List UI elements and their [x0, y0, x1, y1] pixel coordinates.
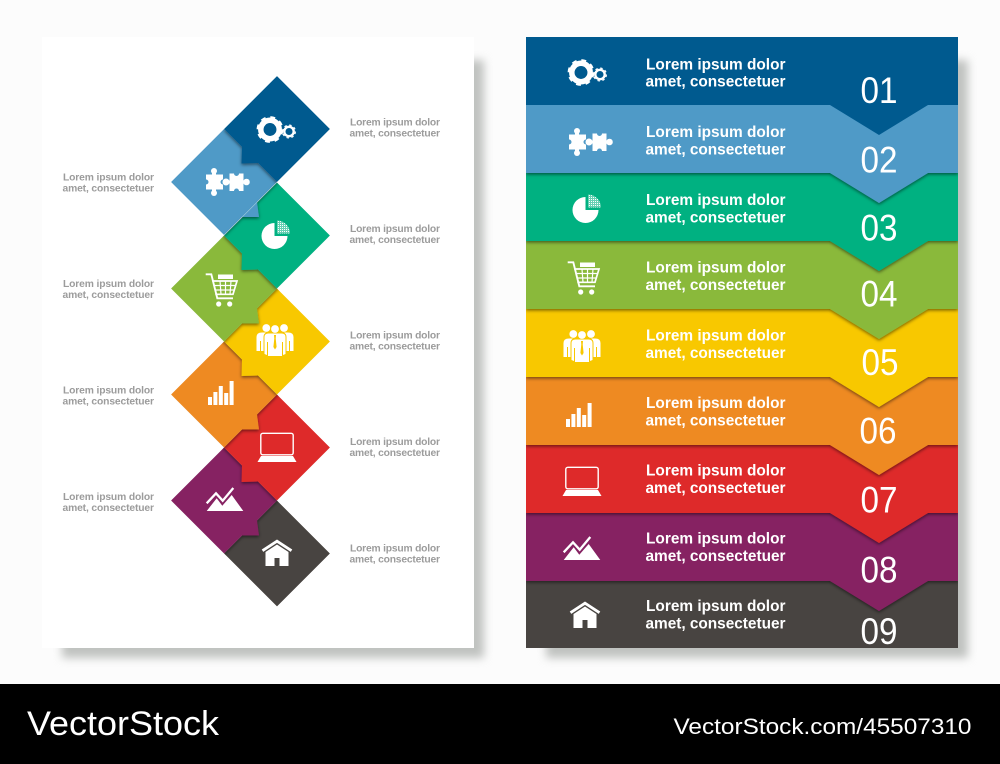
left caption 6: amet, consectetuer: [62, 396, 154, 408]
left caption 7: [350, 437, 440, 459]
ribbon 04: Lorem ipsum dolor: [646, 260, 786, 276]
left caption 5: [350, 330, 440, 352]
ribbon 09: Lorem ipsum dolor: [646, 598, 786, 615]
ribbon 08: amet, consectetuer: [646, 548, 786, 565]
ribbon 01: Lorem ipsum dolor: [646, 56, 786, 73]
ribbon 02: 02: [860, 140, 898, 180]
ribbon 03: amet, consectetuer: [646, 210, 786, 226]
diamond 6: orange bars: [171, 342, 277, 448]
left caption 4: Lorem ipsum dolor: [63, 279, 154, 290]
ribbon 06: Lorem ipsum dolor: [646, 395, 786, 412]
ribbon 07: 07: [860, 480, 898, 520]
ribbon 02: amet, consectetuer: [646, 142, 786, 158]
diamond 2: light blue puzzle: [171, 129, 277, 235]
ribbon 01: amet, consectetuer: [646, 74, 786, 91]
panel: numbered ribbons: [526, 37, 958, 652]
ribbon 05: [526, 309, 958, 407]
left caption 7: amet, consectetuer: [350, 448, 440, 459]
left caption 9: [350, 544, 440, 566]
footer bar: [0, 684, 1000, 764]
diamond 1: navy gears: [224, 76, 330, 182]
left caption 2: [62, 172, 154, 194]
ribbon 03: [526, 173, 958, 271]
left caption 3: amet, consectetuer: [350, 235, 440, 246]
left caption 3: [350, 224, 440, 246]
ribbon 05: amet, consectetuer: [646, 345, 786, 362]
left caption 2: amet, consectetuer: [62, 184, 154, 194]
diamond 9: dark grey home: [224, 500, 330, 606]
ribbon 07: [526, 445, 958, 543]
left caption 6: Lorem ipsum dolor: [63, 386, 154, 396]
footer image id: VectorStock.com/45507310: [674, 714, 972, 739]
left caption 1: amet, consectetuer: [350, 128, 440, 140]
left caption 8: Lorem ipsum dolor: [63, 492, 154, 503]
left panel background: [42, 37, 474, 648]
ribbon 02: Lorem ipsum dolor: [646, 124, 786, 141]
ribbon 05: 05: [862, 342, 898, 383]
ribbon 06: [526, 377, 958, 475]
ribbon 08: 08: [860, 550, 898, 590]
diamond 5: yellow people: [224, 288, 330, 394]
left caption 7: Lorem ipsum dolor: [350, 437, 440, 448]
left caption 4: amet, consectetuer: [62, 290, 154, 301]
right panel shadow: [546, 60, 968, 658]
left caption 1: Lorem ipsum dolor: [350, 118, 440, 128]
ribbon 09: [526, 581, 958, 652]
diamond 8: purple chart: [171, 448, 277, 554]
left caption 5: amet, consectetuer: [350, 342, 440, 352]
left caption 6: [62, 386, 154, 408]
ribbon 02: [526, 105, 958, 203]
ribbon 07: Lorem ipsum dolor: [646, 462, 786, 480]
ribbon 04: 04: [860, 274, 898, 314]
ribbon 09: 09: [860, 611, 898, 652]
left caption 9: Lorem ipsum dolor: [350, 544, 440, 554]
left caption 8: amet, consectetuer: [62, 503, 154, 514]
ribbon 04: amet, consectetuer: [646, 277, 786, 294]
diamond 4: olive cart: [171, 236, 277, 342]
diamond 3: green pie: [224, 182, 330, 288]
footer logo text: VectorStock: [27, 705, 220, 743]
left caption 4: [62, 279, 154, 301]
ribbon 08: Lorem ipsum dolor: [646, 530, 786, 548]
ribbon 04: [526, 241, 958, 339]
left caption 5: Lorem ipsum dolor: [350, 330, 440, 342]
left caption 1: [350, 118, 440, 140]
diamond 7: red laptop: [224, 394, 330, 500]
ribbon 01: 01: [860, 70, 898, 111]
ribbon 06: 06: [860, 410, 896, 452]
left caption 8: [62, 492, 154, 514]
left caption 9: amet, consectetuer: [350, 554, 440, 566]
left caption 3: Lorem ipsum dolor: [350, 224, 440, 235]
ribbon 07: amet, consectetuer: [646, 480, 786, 497]
ribbon 09: amet, consectetuer: [646, 616, 786, 632]
left caption 2: Lorem ipsum dolor: [63, 172, 154, 184]
ribbon 05: Lorem ipsum dolor: [646, 328, 786, 344]
left panel shadow: [62, 60, 484, 658]
ribbon 03: 03: [860, 208, 898, 248]
ribbon 08: [526, 513, 958, 611]
ribbon 03: Lorem ipsum dolor: [646, 192, 786, 209]
ribbon 06: amet, consectetuer: [646, 412, 786, 430]
panel: diamond steps: [171, 76, 330, 606]
ribbon 01: [526, 37, 958, 135]
